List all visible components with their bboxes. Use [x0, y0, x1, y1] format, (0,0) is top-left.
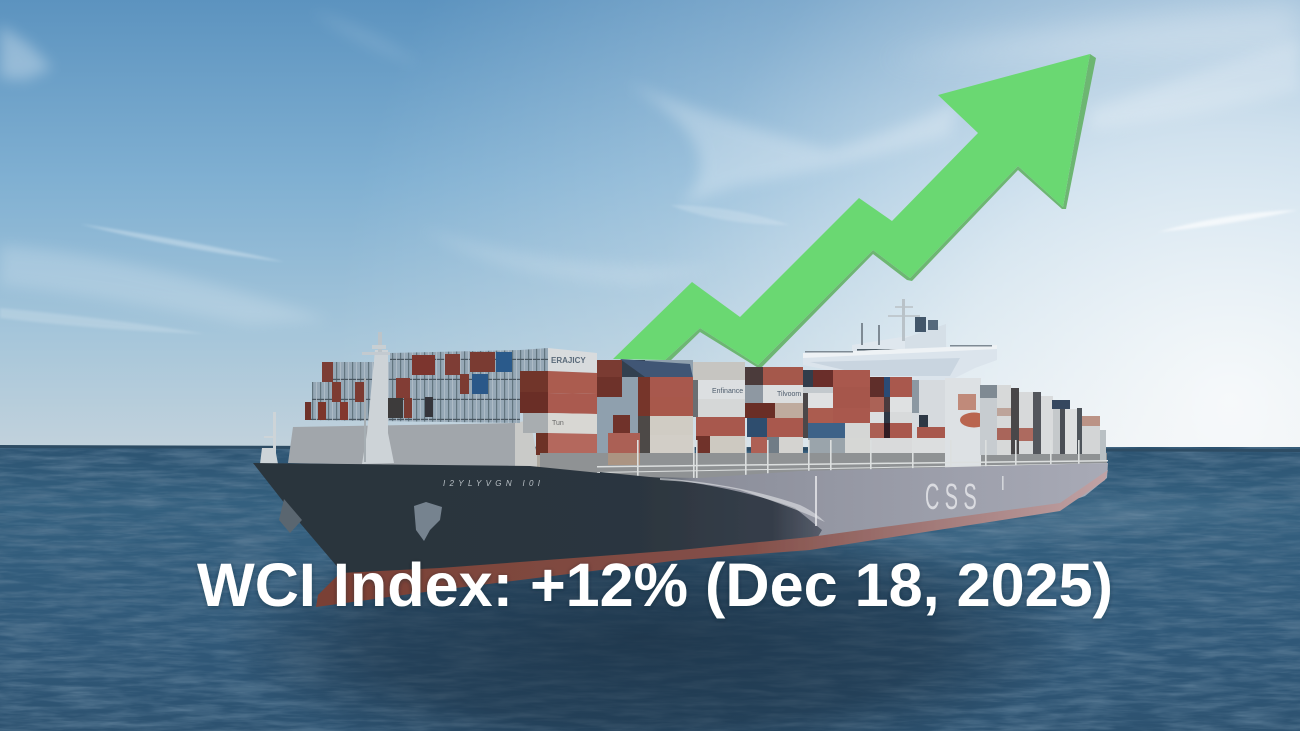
title text: WCI Index: +12% (Dec 18, 2025) [197, 551, 1113, 619]
gray forward deck block [288, 423, 515, 468]
sea [0, 445, 1300, 731]
aft stacks [980, 385, 997, 455]
bow mast [260, 412, 278, 464]
stack x693-745 [693, 362, 745, 382]
hull bow flare [600, 472, 822, 560]
midship container stacks: Enfinance [712, 388, 743, 395]
stack x597-660 [597, 360, 693, 453]
ship: C S S [925, 478, 977, 518]
ship shadow on water [200, 510, 1100, 731]
midship container stacks [540, 359, 1107, 481]
clouds [0, 0, 1300, 334]
boot stripe [316, 470, 1108, 607]
stack x870-912 [870, 377, 884, 397]
anchor [414, 502, 442, 541]
forward container stack [305, 348, 548, 423]
sky background [0, 0, 1300, 450]
bow bulb fitting [279, 499, 302, 533]
stack x912-945 [912, 380, 945, 438]
base deck band [540, 453, 1107, 481]
forward stack front face [520, 348, 597, 469]
lifeboat area [945, 378, 981, 468]
hull lettering: I2YLYVGN I0I [443, 479, 541, 488]
arrow: rising green [613, 54, 1096, 369]
ship wake [830, 500, 1300, 553]
stack x745-803 [745, 367, 803, 385]
forward stack front face: ERAJICY [551, 356, 586, 365]
ship [253, 299, 1108, 607]
forward stack front face: Tun [552, 420, 564, 427]
forward mast [362, 332, 394, 464]
bridge superstructure [803, 299, 997, 440]
stack x803-870 [803, 370, 833, 393]
midship container stacks: Tilvoom [777, 391, 801, 398]
hull [253, 463, 1108, 590]
deck railing and posts [597, 440, 1108, 478]
